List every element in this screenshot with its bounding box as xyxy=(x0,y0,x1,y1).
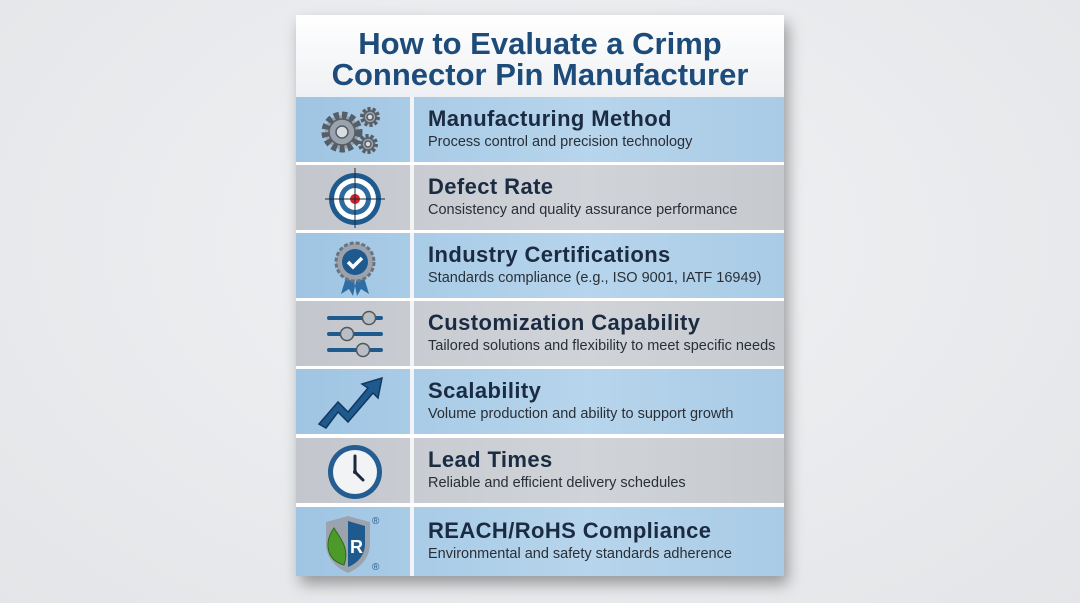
text: Lead Times xyxy=(428,447,553,472)
row: defect rate xyxy=(296,165,784,230)
row: manufacturing method xyxy=(296,97,784,162)
text: Standards compliance (e.g., ISO 9001, IATF 16949) xyxy=(428,270,761,286)
text: Scalability xyxy=(428,378,541,403)
text: Volume production and ability to support growth xyxy=(428,406,734,422)
text: Tailored solutions and flexibility to meet specific needs xyxy=(428,338,775,354)
text: Environmental and safety standards adherence xyxy=(428,546,732,562)
icon: clock xyxy=(296,438,414,503)
text xyxy=(428,106,692,150)
icon: shield leaf: ® xyxy=(372,562,380,573)
row: lead times xyxy=(296,438,784,503)
row: reach/rohs xyxy=(296,507,784,576)
text: Manufacturing Method xyxy=(428,106,672,131)
icon: badge xyxy=(296,233,414,298)
row: scalability xyxy=(296,369,784,434)
icon: target xyxy=(296,165,414,230)
text xyxy=(428,518,732,562)
title xyxy=(296,15,784,97)
text xyxy=(428,447,686,491)
text xyxy=(428,378,734,422)
text xyxy=(428,174,738,218)
icon: shield leaf: R xyxy=(350,537,363,557)
text: Customization Capability xyxy=(428,310,700,335)
icon: shield leaf xyxy=(296,507,414,576)
icon: gears xyxy=(296,97,414,162)
text: Process control and precision technology xyxy=(428,134,692,150)
icon: shield leaf: ® xyxy=(372,516,380,527)
row: certifications xyxy=(296,233,784,298)
text: REACH/RoHS Compliance xyxy=(428,518,711,543)
text xyxy=(428,242,761,286)
text xyxy=(428,310,775,354)
text: Industry Certifications xyxy=(428,242,671,267)
title: How to Evaluate a Crimp xyxy=(358,26,722,61)
icon: growth arrow xyxy=(296,369,414,434)
title: Connector Pin Manufacturer xyxy=(332,57,748,92)
text: Reliable and efficient delivery schedules xyxy=(428,475,686,491)
text: Defect Rate xyxy=(428,174,553,199)
row: customization xyxy=(296,301,784,366)
card xyxy=(296,15,784,576)
text: Consistency and quality assurance performance xyxy=(428,202,738,218)
icon: sliders xyxy=(296,301,414,366)
